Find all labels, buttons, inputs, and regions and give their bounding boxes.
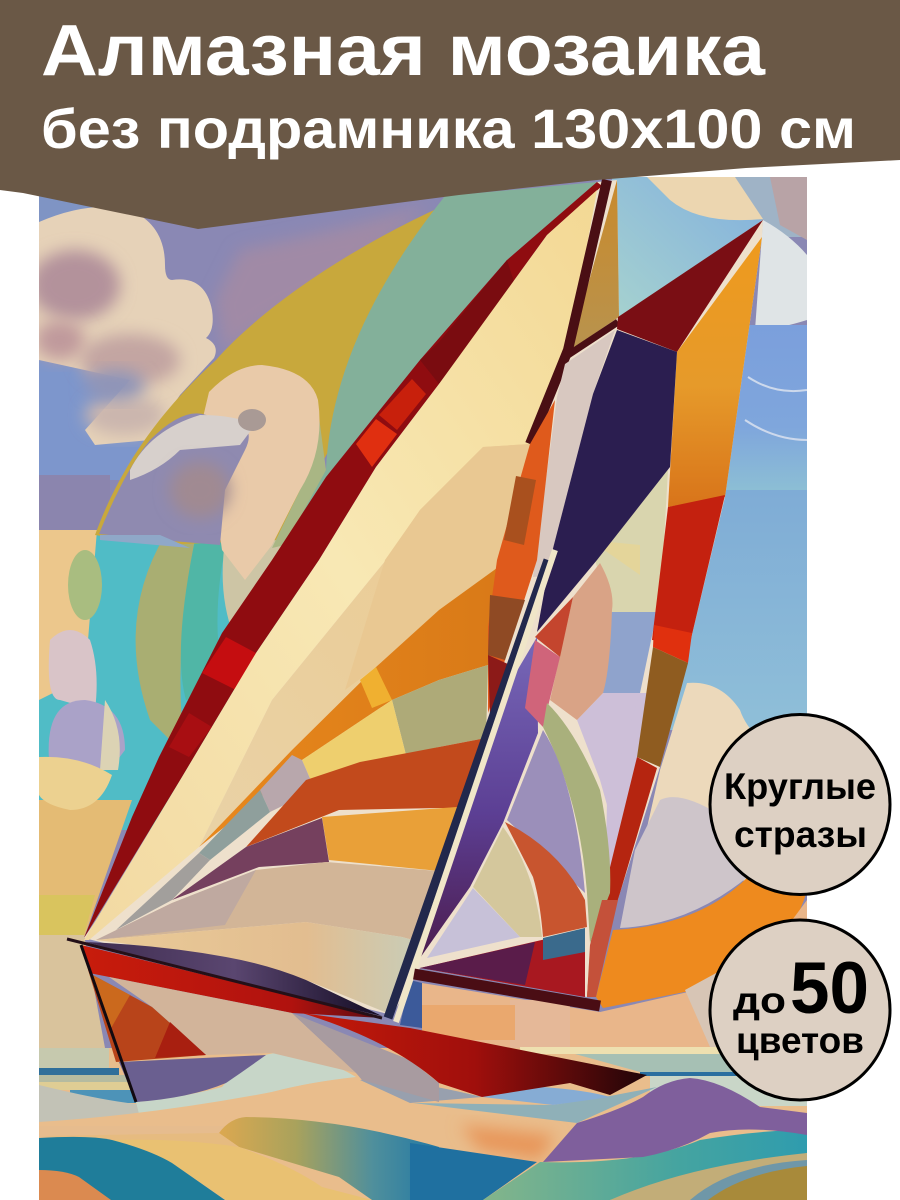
left clouds <box>30 207 216 810</box>
mast and rigging <box>530 180 619 444</box>
lower right <box>610 1153 807 1200</box>
grey and white wave <box>39 1085 138 1122</box>
sand wave <box>40 1082 318 1122</box>
hull <box>67 939 647 1102</box>
purple hill <box>543 1078 807 1162</box>
mast strip <box>388 550 555 1022</box>
purple wedge <box>172 818 329 900</box>
purple wedge <box>86 942 382 1016</box>
orange panel <box>668 237 762 507</box>
badge: up to 50 colours <box>710 920 890 1100</box>
orange band <box>199 568 497 847</box>
green arc <box>543 703 610 943</box>
right sky <box>422 177 807 1050</box>
centre panels <box>550 470 668 900</box>
water and waves <box>39 1047 807 1200</box>
horizon stripes <box>39 1048 109 1068</box>
badge: up to 50 colours: цветов <box>736 1020 864 1061</box>
blue wave <box>410 1143 537 1200</box>
red triangle <box>535 597 573 657</box>
lavender panel <box>427 888 520 958</box>
subtitle: без подрамника 130х100 см <box>41 97 856 160</box>
jib sail <box>420 220 763 997</box>
main sail <box>84 182 602 1015</box>
purple panel <box>420 637 538 958</box>
badge: round rhinestones: Круглые <box>724 766 876 807</box>
middle cloud <box>99 365 320 580</box>
pink panel <box>525 640 560 727</box>
left orange strip <box>488 400 555 713</box>
right cloud <box>648 682 750 880</box>
red side <box>302 1013 647 1097</box>
hull body <box>81 945 382 1018</box>
orange swoosh <box>596 878 806 1008</box>
lower red strip <box>587 757 657 997</box>
bow lines <box>67 939 382 1018</box>
badge: round rhinestones: стразы <box>734 814 867 855</box>
tan panel <box>200 562 384 846</box>
yellow panel <box>302 700 406 779</box>
gradient sea <box>219 1117 439 1200</box>
peach sky <box>422 900 807 1050</box>
olive panel <box>392 665 488 755</box>
lavender arc <box>507 730 585 893</box>
lower triangle <box>420 930 585 997</box>
red panel <box>652 495 725 643</box>
luff band <box>84 182 602 938</box>
lower-left sky <box>39 530 300 830</box>
badge: up to 50 colours: 50 <box>790 948 869 1029</box>
green wave <box>483 1130 807 1200</box>
title: Алмазная мозаика <box>41 11 766 91</box>
teal wave <box>39 1137 225 1200</box>
yellow and green arcs <box>95 182 597 548</box>
thin strip <box>587 900 618 997</box>
maroon head <box>617 220 763 352</box>
painting: sailboat <box>30 177 807 1200</box>
badge: up to 50 colours: до <box>733 980 786 1021</box>
cream strip <box>84 190 597 940</box>
blue wave bands <box>413 1087 657 1123</box>
blue post <box>400 980 422 1028</box>
cream lower panel <box>96 922 420 1015</box>
orange-red arc <box>505 822 587 937</box>
header banner <box>0 0 900 229</box>
beige arc <box>473 827 542 937</box>
yellow lens <box>112 1140 372 1200</box>
tan panel <box>96 862 450 942</box>
boom <box>414 974 600 1006</box>
rust band <box>246 738 486 847</box>
grey panel <box>533 330 615 577</box>
badge: round rhinestones <box>710 714 890 894</box>
sail underlay <box>84 180 763 1015</box>
brown panel <box>637 647 688 767</box>
navy panel <box>537 330 677 632</box>
lower orange <box>322 807 457 870</box>
lavender and grey streaks <box>260 755 315 812</box>
sky background <box>39 178 807 1048</box>
